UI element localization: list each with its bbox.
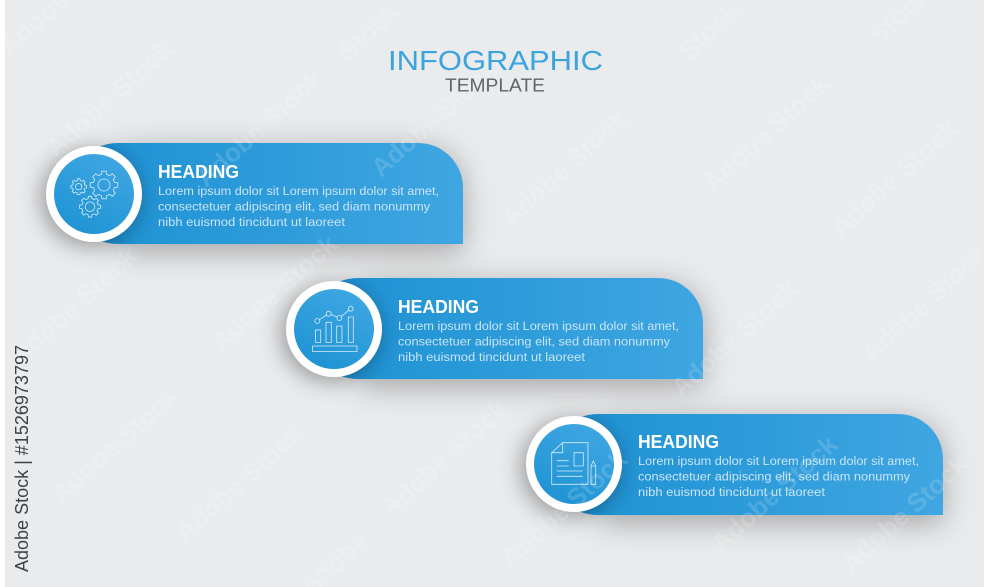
watermark pattern: Adobe Stock <box>40 34 178 163</box>
title line: infographic: INFOGRAPHIC <box>388 45 603 76</box>
card body <box>548 414 943 515</box>
white ring <box>286 281 382 377</box>
body text: Lorem ipsum dolor sit Lorem ipsum dolor sit amet, <box>158 184 439 198</box>
heading: HEADING <box>638 431 719 452</box>
watermark pattern: Adobe Stock <box>45 381 183 510</box>
watermark pattern: Adobe Stock <box>495 444 633 573</box>
card body <box>68 143 463 244</box>
watermark pattern: Adobe Stock <box>375 394 513 523</box>
white ring <box>46 146 142 242</box>
body text <box>158 184 439 229</box>
panel: step 2 chart <box>281 278 703 387</box>
heading: HEADING <box>398 296 479 317</box>
watermark pattern: Adobe Stock <box>825 114 963 243</box>
watermark pattern: Adobe Stock <box>697 69 835 198</box>
body text: consectetuer adipiscing elit, sed diam nonummy <box>398 334 671 348</box>
heading: HEADING <box>158 161 239 182</box>
watermark pattern: Adobe Stock <box>855 239 993 368</box>
card shadow <box>360 284 703 387</box>
card shadow <box>120 149 463 252</box>
body text: nibh euismod tincidunt ut laoreet <box>158 215 346 229</box>
icon: gears <box>71 171 118 217</box>
body text <box>398 319 679 364</box>
body text: consectetuer adipiscing elit, sed diam nonummy <box>638 470 911 484</box>
watermark pattern: Adobe Stock <box>5 241 143 370</box>
body text: consectetuer adipiscing elit, sed diam nonummy <box>158 200 431 214</box>
watermark pattern: Adobe Stock <box>665 274 803 403</box>
circle shadow <box>521 419 619 517</box>
card shadow <box>600 420 943 523</box>
body text: Lorem ipsum dolor sit Lorem ipsum dolor sit amet, <box>638 454 919 468</box>
watermark pattern: Adobe Stock <box>205 229 343 358</box>
inner circle <box>294 289 374 369</box>
inner circle <box>534 424 614 504</box>
subtitle line: template: TEMPLATE <box>445 76 545 96</box>
circle shadow <box>281 284 379 382</box>
watermark pattern: Adobe Stock <box>495 104 633 233</box>
icon: document and pencil <box>552 443 596 484</box>
watermark pattern: Adobe Stock <box>365 54 503 183</box>
body text <box>638 454 919 499</box>
stock id label: Adobe Stock | #1526973797 <box>11 345 32 572</box>
body text: Lorem ipsum dolor sit Lorem ipsum dolor sit amet, <box>398 319 679 333</box>
watermark pattern: Adobe Stock <box>835 449 973 578</box>
watermark pattern: Adobe Stock <box>170 419 308 548</box>
inner circle <box>54 154 134 234</box>
body text: nibh euismod tincidunt ut laoreet <box>398 350 586 364</box>
icon: bar chart with trend line <box>312 306 357 352</box>
white ring <box>526 416 622 512</box>
card body <box>308 278 703 379</box>
panel: step 1 gears <box>41 143 463 252</box>
watermark pattern: Adobe Stock <box>705 429 843 558</box>
panel: step 3 document <box>521 414 943 523</box>
body text: nibh euismod tincidunt ut laoreet <box>638 485 826 499</box>
watermark pattern: Adobe Stock <box>190 64 328 193</box>
title <box>388 45 603 96</box>
circle shadow <box>41 149 139 247</box>
